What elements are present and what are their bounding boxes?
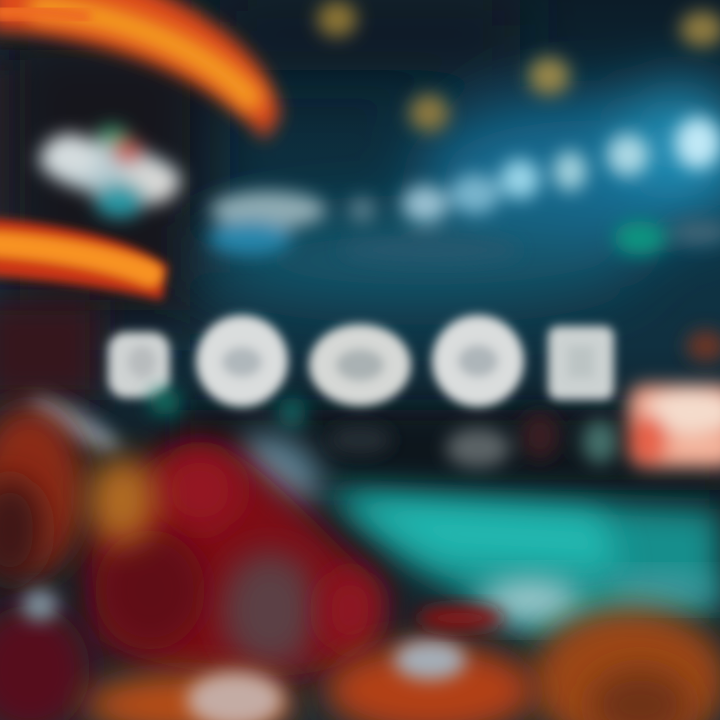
teal court [24, 389, 720, 640]
icon: circle [432, 315, 524, 407]
red crowd foreground [0, 405, 382, 720]
icon: circle [196, 315, 288, 407]
orange crowd foreground [85, 606, 720, 720]
icon: eye-shaped ellipse [309, 324, 411, 406]
second orange band [0, 218, 168, 300]
icon: rounded square right [548, 326, 614, 400]
dark red left wall [0, 60, 720, 490]
screen: peach and white panel right [628, 384, 720, 468]
white logo cluster [35, 126, 185, 218]
icon: rounded square left [108, 332, 170, 398]
gold ceiling lights [317, 1, 720, 132]
row of five white icons [108, 315, 614, 407]
middle row of glowing lights [208, 117, 720, 262]
blue glow upper right [0, 0, 720, 330]
small teal and grey lights under icons [149, 330, 720, 468]
top orange canopy [0, 0, 280, 140]
